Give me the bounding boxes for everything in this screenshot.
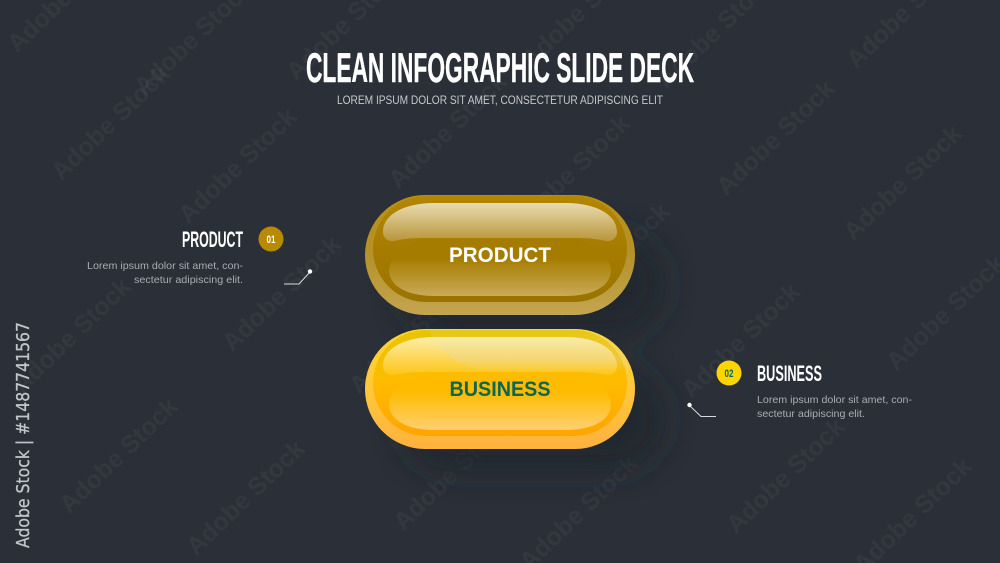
watermark pattern: Adobe Stock — [546, 198, 675, 324]
watermark pattern: Adobe Stock — [383, 68, 512, 194]
watermark pattern: Adobe Stock — [711, 75, 840, 201]
badge: 02 — [716, 360, 742, 386]
pill shadows — [400, 232, 665, 471]
connector: product — [284, 269, 312, 284]
description: business: sectetur adipiscing elit. — [757, 408, 865, 420]
watermark pattern: Adobe Stock — [676, 278, 805, 404]
pill: business — [365, 329, 635, 449]
watermark pattern: Adobe Stock — [173, 103, 302, 229]
badge: 02: 02 — [724, 368, 734, 380]
callout: product — [87, 226, 312, 286]
badge: 01: 01 — [266, 234, 276, 246]
watermark pattern: Adobe Stock — [54, 393, 183, 519]
heading: product: PRODUCT — [182, 227, 243, 252]
pill: product — [365, 195, 635, 315]
callout: business — [687, 360, 912, 420]
description: product — [87, 260, 243, 286]
watermark pattern: Adobe Stock — [217, 231, 346, 357]
watermark pattern: Adobe Stock — [46, 60, 175, 186]
watermark pattern: Adobe Stock — [838, 120, 967, 246]
watermark pattern: Adobe Stock — [388, 410, 517, 536]
label: business: BUSINESS — [450, 378, 550, 401]
infographic slide — [15, 52, 912, 548]
watermark pattern: Adobe Stock — [181, 435, 310, 561]
description: product: Lorem ipsum dolor sit amet, con- — [87, 260, 243, 272]
label: product: PRODUCT — [449, 244, 551, 267]
description: business: Lorem ipsum dolor sit amet, con- — [757, 394, 912, 406]
watermark pattern: Adobe Stock — [506, 110, 635, 236]
description: product: sectetur adipiscing elit. — [134, 274, 243, 286]
watermark pattern: Adobe Stock — [7, 273, 136, 399]
heading: business: BUSINESS — [757, 361, 822, 386]
connector: business — [687, 403, 716, 416]
badge: 01 — [258, 226, 284, 252]
watermark pattern: Adobe Stock — [344, 274, 473, 400]
subtitle: LOREM IPSUM DOLOR SIT AMET, CONSECTETUR ADIPISCING ELIT — [337, 95, 663, 107]
watermark pattern: Adobe Stock — [721, 413, 850, 539]
description: business — [757, 394, 912, 420]
stock id label: Adobe Stock | #1487741567 — [13, 322, 34, 548]
